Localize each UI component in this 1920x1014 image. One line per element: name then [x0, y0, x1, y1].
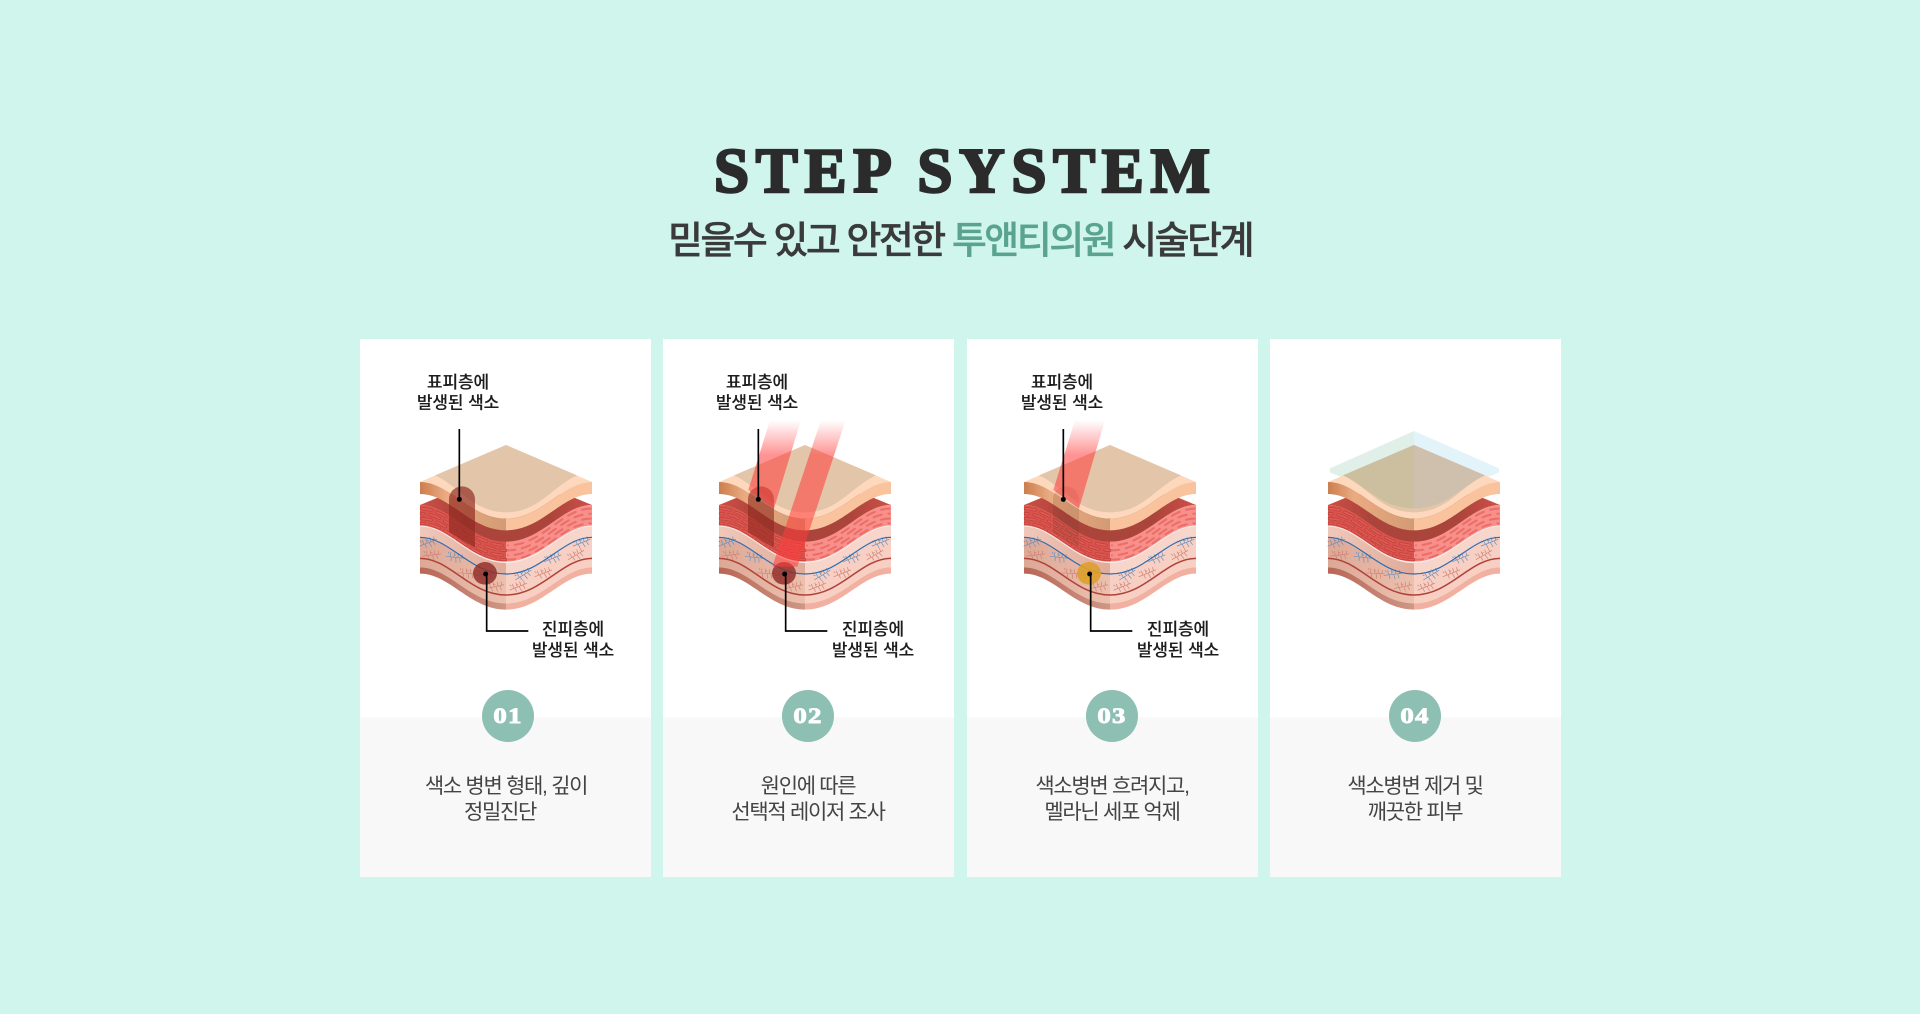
label: epidermis pigment: 발생된 색소 [716, 394, 798, 412]
step number badge [482, 690, 534, 742]
illustration: skin layers with two laser beams [719, 420, 891, 631]
step number badge: 03 [1097, 704, 1127, 728]
step number badge [1389, 690, 1441, 742]
description: 색소 병변 형태, 깊이 [425, 775, 587, 798]
step number badge [1086, 690, 1138, 742]
step number badge: 01 [493, 704, 523, 728]
panel: step 04 [1270, 339, 1561, 877]
illustration: skin layers with fading pigment [1024, 420, 1196, 631]
label: dermis pigment: 진피층에 [842, 620, 904, 639]
panel: step 01 [360, 339, 651, 877]
title: STEP SYSTEM [714, 136, 1210, 206]
label: dermis pigment: 발생된 색소 [532, 641, 614, 660]
subtitle: 믿을수 있고 안전한 투앤티의원 시술단계 [668, 220, 1252, 262]
description: 선택적 레이저 조사 [731, 801, 886, 824]
illustration: skin layers with epidermal and dermal pigment [420, 429, 592, 631]
description: 깨끗한 피부 [1368, 801, 1463, 824]
label: dermis pigment: 진피층에 [1147, 620, 1209, 639]
label: epidermis pigment: 발생된 색소 [1021, 394, 1103, 412]
description: 색소병변 제거 및 [1347, 775, 1483, 798]
card background [1270, 339, 1561, 877]
card background [663, 339, 954, 877]
label: epidermis pigment: 표피층에 [726, 373, 788, 392]
description: 멜라닌 세포 억제 [1044, 801, 1180, 824]
label: dermis pigment: 진피층에 [542, 620, 604, 639]
label: epidermis pigment: 발생된 색소 [417, 394, 499, 412]
step number badge: 02 [793, 704, 823, 728]
card background [360, 339, 651, 877]
description: 원인에 따른 [761, 775, 856, 798]
card background [967, 339, 1258, 877]
illustration: clean skin with protective film [1328, 431, 1500, 610]
label: dermis pigment: 발생된 색소 [1137, 641, 1219, 660]
label: dermis pigment: 발생된 색소 [832, 641, 914, 660]
description: 색소병변 흐려지고, [1035, 775, 1189, 798]
label: epidermis pigment: 표피층에 [1031, 373, 1093, 392]
panel: step 03 [967, 339, 1258, 877]
description: 정밀진단 [464, 801, 537, 824]
step number badge: 04 [1400, 704, 1430, 728]
step number badge [782, 690, 834, 742]
label: epidermis pigment: 표피층에 [427, 373, 489, 392]
panel: step 02 [663, 339, 954, 877]
